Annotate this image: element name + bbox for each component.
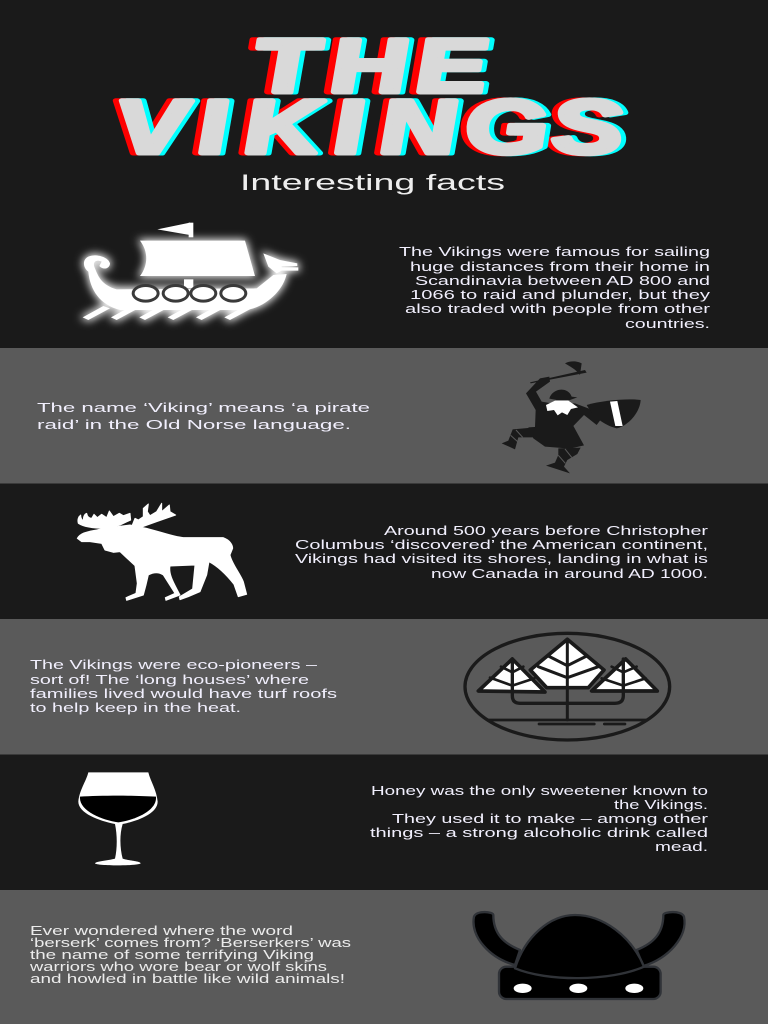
text: honey fact: Honey was the only sweetener known to [371,783,708,798]
text: America fact: Vikings had visited its shores, landing in what is [295,551,709,566]
icon: moose [77,503,247,600]
text: name meaning fact: raid’ in the Old Norse language. [37,417,351,432]
panel: berserkers [0,890,768,1024]
heading: The: THE [242,23,487,108]
text: berserk fact: Ever wondered where the word [30,924,293,938]
panel: America [0,484,768,618]
text: sailing fact: The Vikings were famous for sailing [399,244,710,259]
text: berserk fact [29,924,351,986]
icon: viking warrior [502,361,641,473]
text: berserk fact: and howled in battle like wild animals! [30,972,345,986]
text: sailing fact: Scandinavia between AD 800 and [415,273,710,288]
text: long houses fact [30,657,338,715]
panel: long houses [0,619,768,754]
text: America fact: Columbus ‘discovered’ the American continent, [295,537,708,552]
text: name meaning fact [37,400,370,432]
text: honey fact: things – a strong alcoholic drink called [370,825,708,840]
text: sailing fact: 1066 to raid and plunder, but they [410,287,711,302]
text: long houses fact: The Vikings were eco-pioneers – [30,657,318,672]
panel: honey mead [0,755,768,890]
text: America fact [295,523,709,581]
text: sailing fact [399,244,711,331]
icon: glass of mead [78,772,158,865]
text: sailing fact: also traded with people from other [405,301,711,316]
text: honey fact [370,783,709,854]
text: long houses fact: families lived would have turf roofs [30,686,338,701]
text: sailing fact: huge distances from their home in [410,259,710,274]
text: name meaning fact: The name ‘Viking’ means ‘a pirate [37,400,370,415]
icon: longship [83,223,298,320]
text: America fact: Around 500 years before Christopher [384,523,709,538]
panel: sailing [0,200,768,348]
text: honey fact: They used it to make – among other [392,811,709,826]
panel: name meaning [0,348,768,484]
subtitle: Interesting facts [240,170,505,195]
icon: horned helmet [473,912,685,999]
heading: Vikings: VIKINGS [117,84,632,169]
heading: Vikings: VIKINGS [112,84,627,169]
text: long houses fact: sort of! The ‘long houses’ where [30,672,309,687]
icon: trees in circle [465,633,670,740]
text: honey fact: the Vikings. [614,797,708,812]
heading: Vikings: VIKINGS [106,84,621,169]
text: honey fact: mead. [655,839,708,854]
text: berserk fact: the name of some terrifying Viking [30,948,314,962]
text: berserk fact: warriors who wore bear or wolf skins [29,960,327,974]
text: long houses fact: to help keep in the heat. [30,700,241,715]
title block [106,23,632,195]
heading: The: THE [249,23,494,108]
text: sailing fact: countries. [625,316,710,331]
text: berserk fact: ‘berserk’ comes from? ‘Berserkers’ was [30,936,351,950]
heading: The: THE [254,23,499,108]
text: America fact: now Canada in around AD 1000. [431,566,708,581]
